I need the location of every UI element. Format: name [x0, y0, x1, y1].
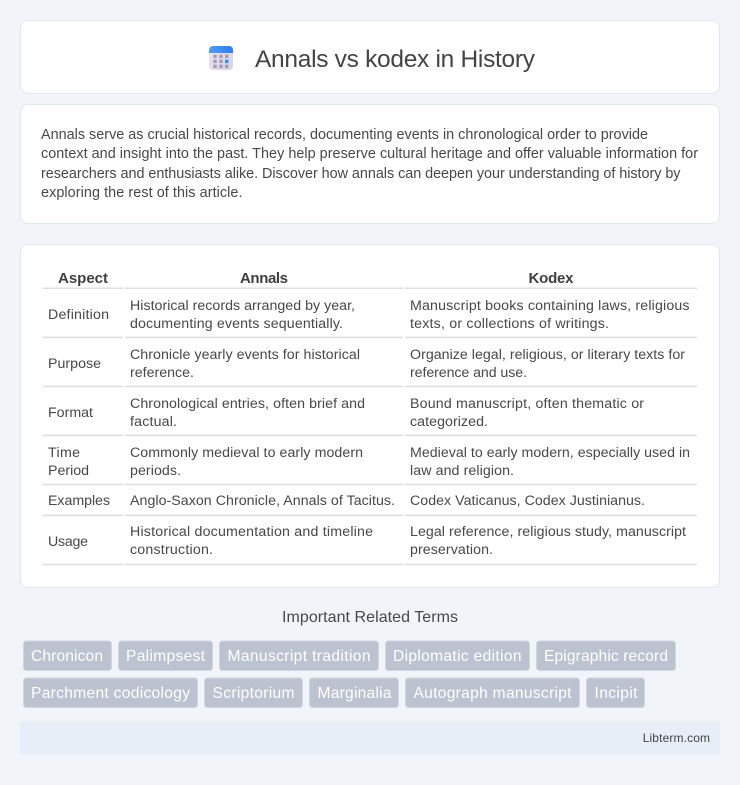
row: usage: Historical documentation and timeline — [130, 524, 373, 540]
row: format — [48, 396, 644, 430]
row: definition: Definition — [48, 307, 109, 323]
row: format: Bound manuscript, often thematic or — [410, 396, 644, 412]
title: Annals vs kodex in History — [255, 46, 536, 73]
table header: Aspect — [58, 270, 108, 287]
panel: comparison table — [20, 244, 720, 588]
row: purpose: Chronicle yearly events for historical — [130, 347, 360, 363]
row: purpose: reference and use. — [410, 365, 527, 381]
panel: introduction — [20, 104, 720, 224]
row: time period — [48, 445, 690, 479]
row: time period: Medieval to early modern, especially used in — [410, 445, 690, 461]
tag: Manuscript tradition — [220, 641, 378, 670]
related terms heading: Important Related Terms — [282, 609, 458, 626]
row: time period: periods. — [130, 463, 181, 479]
row: examples — [48, 493, 645, 509]
tag: Marginalia — [310, 678, 398, 708]
row: examples: Anglo-Saxon Chronicle, Annals of Tacitus. — [130, 493, 395, 509]
row: time period: law and religion. — [410, 463, 514, 479]
tag: Chronicon — [24, 641, 112, 670]
footer credit: Libterm.com — [643, 731, 710, 745]
row: format: factual. — [130, 414, 177, 430]
footer — [20, 721, 720, 755]
row: usage: Usage — [48, 534, 88, 550]
tag: Parchment codicology — [24, 678, 198, 708]
row: time period: Time — [48, 445, 80, 461]
intro text: context and insight into the past. They help preserve cultural heritage and offer valuable information for — [41, 146, 698, 162]
row: usage: preservation. — [410, 542, 493, 558]
row: purpose: Organize legal, religious, or literary texts for — [410, 347, 685, 363]
row: format: Chronological entries, often brief and — [130, 396, 365, 412]
row: definition: Manuscript books containing laws, religious — [410, 298, 690, 314]
row: examples: Examples — [48, 493, 110, 509]
tag: Marginalia: Marginalia — [318, 685, 392, 702]
tag: Parchment codicology: Parchment codicology — [31, 685, 190, 702]
tag: Incipit: Incipit — [594, 685, 638, 702]
row: usage: construction. — [130, 542, 213, 558]
table header: Annals — [240, 270, 288, 287]
intro text — [41, 127, 698, 201]
row: time period: Period — [48, 463, 89, 479]
row: format: categorized. — [410, 414, 488, 430]
row: usage — [48, 524, 686, 558]
panel: header — [20, 20, 720, 94]
tag: Palimpsest: Palimpsest — [126, 648, 206, 665]
tag: Incipit — [586, 678, 644, 708]
tag: Manuscript tradition: Manuscript tradition — [228, 648, 370, 665]
intro text: exploring the rest of this article. — [41, 185, 242, 201]
related terms tags — [24, 641, 676, 708]
tag: Palimpsest — [118, 641, 212, 670]
table rules — [43, 288, 697, 565]
table header: Kodex — [528, 270, 574, 287]
row: purpose — [48, 347, 685, 381]
row: time period: Commonly medieval to early modern — [130, 445, 363, 461]
row: definition: documenting events sequentially. — [130, 316, 343, 332]
row: definition: Historical records arranged by year, — [130, 298, 355, 314]
tag: Diplomatic edition — [386, 641, 530, 670]
row: definition: texts, or collections of writings. — [410, 316, 609, 332]
table header — [58, 270, 574, 287]
row: usage: Legal reference, religious study, manuscript — [410, 524, 686, 540]
row: definition — [48, 298, 690, 332]
tag: Autograph manuscript — [406, 678, 580, 708]
tag: Epigraphic record: Epigraphic record — [544, 648, 668, 665]
row: purpose: Purpose — [48, 356, 101, 372]
icon: calendar — [209, 46, 233, 70]
row: purpose: reference. — [130, 365, 194, 381]
intro text: Annals serve as crucial historical records, documenting events in chronological order to provide — [41, 127, 648, 143]
intro text: researchers and enthusiasts alike. Discover how annals can deepen your understanding of history by — [41, 166, 681, 182]
tag: Diplomatic edition: Diplomatic edition — [393, 648, 522, 665]
row: format: Format — [48, 405, 93, 421]
row: examples: Codex Vaticanus, Codex Justinianus. — [410, 493, 645, 509]
tag: Autograph manuscript: Autograph manuscript — [414, 685, 572, 702]
tag: Chronicon: Chronicon — [31, 648, 103, 665]
tag: Scriptorium — [204, 678, 302, 708]
tag: Scriptorium: Scriptorium — [212, 685, 294, 702]
tag: Epigraphic record — [536, 641, 676, 670]
